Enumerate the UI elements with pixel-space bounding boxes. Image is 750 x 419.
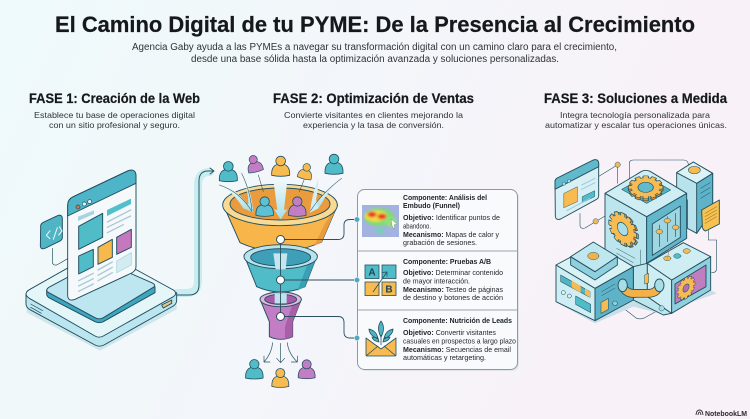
wires [580, 160, 717, 319]
heading: fase 3: automatizar y escalar tus operaciones únicas. [545, 120, 727, 130]
heading: fase 1: FASE 1: Creación de la Web [29, 90, 200, 106]
text: nutricion de leads: Componente: Nutrición de Leads [403, 316, 512, 325]
text: pruebas a/b: Objetivo: Determinar contenido [403, 268, 503, 277]
icon: a/b test: B [385, 284, 393, 296]
text: nutricion de leads: casuales en prospectos a largo plazo [403, 336, 516, 346]
title: El Camino Digital de tu PYME: De la Presencia al Crecimiento [55, 12, 695, 37]
text: pruebas a/b: Componente: Pruebas A/B [403, 257, 491, 266]
text: pruebas a/b: de mayor interacción. [403, 276, 470, 286]
main cube [605, 193, 647, 273]
subtitle: desde una base sólida hasta la optimización avanzada y soluciones personalizadas. [191, 54, 559, 65]
subtitle [132, 42, 617, 65]
text: nutricion de leads: automáticas y retargeting. [403, 353, 486, 362]
icon: email with leaves [366, 321, 396, 356]
shadow [557, 290, 717, 323]
heading: fase 3 [544, 90, 727, 130]
box bottom-left [556, 265, 595, 321]
text: nutricion de leads: Mecanismo: Secuencias de email [403, 345, 511, 354]
arrows: visitors entering funnel [222, 173, 342, 219]
heading: fase 1: con un sitio profesional y seguro. [49, 120, 180, 130]
text: analisis del embudo: Objetivo: Identificar puntos de [403, 213, 500, 222]
sliders [652, 206, 680, 255]
connectors: funnel stages to panel [276, 217, 360, 341]
text: pruebas a/b: de destino y botones de acción [403, 293, 503, 302]
pipe [622, 286, 659, 294]
panel: components [358, 190, 519, 371]
arrows: funnel output [264, 343, 297, 363]
arrow: web to funnel connector [176, 168, 214, 295]
gear left [609, 206, 638, 253]
server right [677, 162, 713, 233]
window panel [555, 160, 599, 219]
heading: fase 3: FASE 3: Soluciones a Medida [544, 90, 727, 106]
heading: fase 2: Convierte visitantes en clientes mejorando la [284, 110, 463, 120]
icon: heatmap [362, 205, 399, 237]
text: analisis del embudo: Embudo (Funnel) [403, 201, 461, 210]
box bottom-right [647, 263, 672, 313]
gear top [628, 176, 663, 201]
text: analisis del embudo: abandono. [403, 222, 431, 230]
heading: fase 2: FASE 2: Optimización de Ventas [273, 90, 474, 106]
heading: fase 1 [29, 90, 200, 130]
text: analisis del embudo [403, 193, 500, 247]
icon: incoming visitors [219, 154, 343, 182]
text: pruebas a/b: Mecanismo: Testeo de páginas [403, 285, 503, 294]
heading: fase 2 [273, 90, 474, 130]
subtitle: Agencia Gaby ayuda a las PYMEs a navegar su transformación digital con un camino claro para el crecimiento, [132, 42, 617, 53]
text: analisis del embudo: grabación de sesiones. [403, 238, 477, 247]
icon: a/b test: A [368, 268, 376, 278]
text: nutricion de leads [403, 316, 516, 362]
lower centre block [633, 263, 672, 315]
text: nutricion de leads: Objetivo: Convertir visitantes [403, 328, 496, 337]
logo: notebooklm: NotebookLM [705, 409, 747, 418]
icon: web page on platform [26, 170, 177, 351]
icon: custom technology machine [555, 160, 719, 323]
icon: conversion funnel [219, 154, 343, 387]
icon: a/b test [365, 265, 396, 296]
heading: fase 1: Establece tu base de operaciones digital [34, 110, 195, 120]
text: analisis del embudo: Mecanismo: Mapas de calor y [403, 230, 499, 239]
heading: fase 3: Integra tecnología personalizada para [560, 110, 710, 120]
heading: fase 2: experiencia y la tasa de conversión. [303, 120, 444, 130]
text: analisis del embudo: Componente: Análisis del [403, 193, 487, 202]
text: pruebas a/b [403, 257, 503, 302]
icon: converted customers [246, 359, 315, 387]
